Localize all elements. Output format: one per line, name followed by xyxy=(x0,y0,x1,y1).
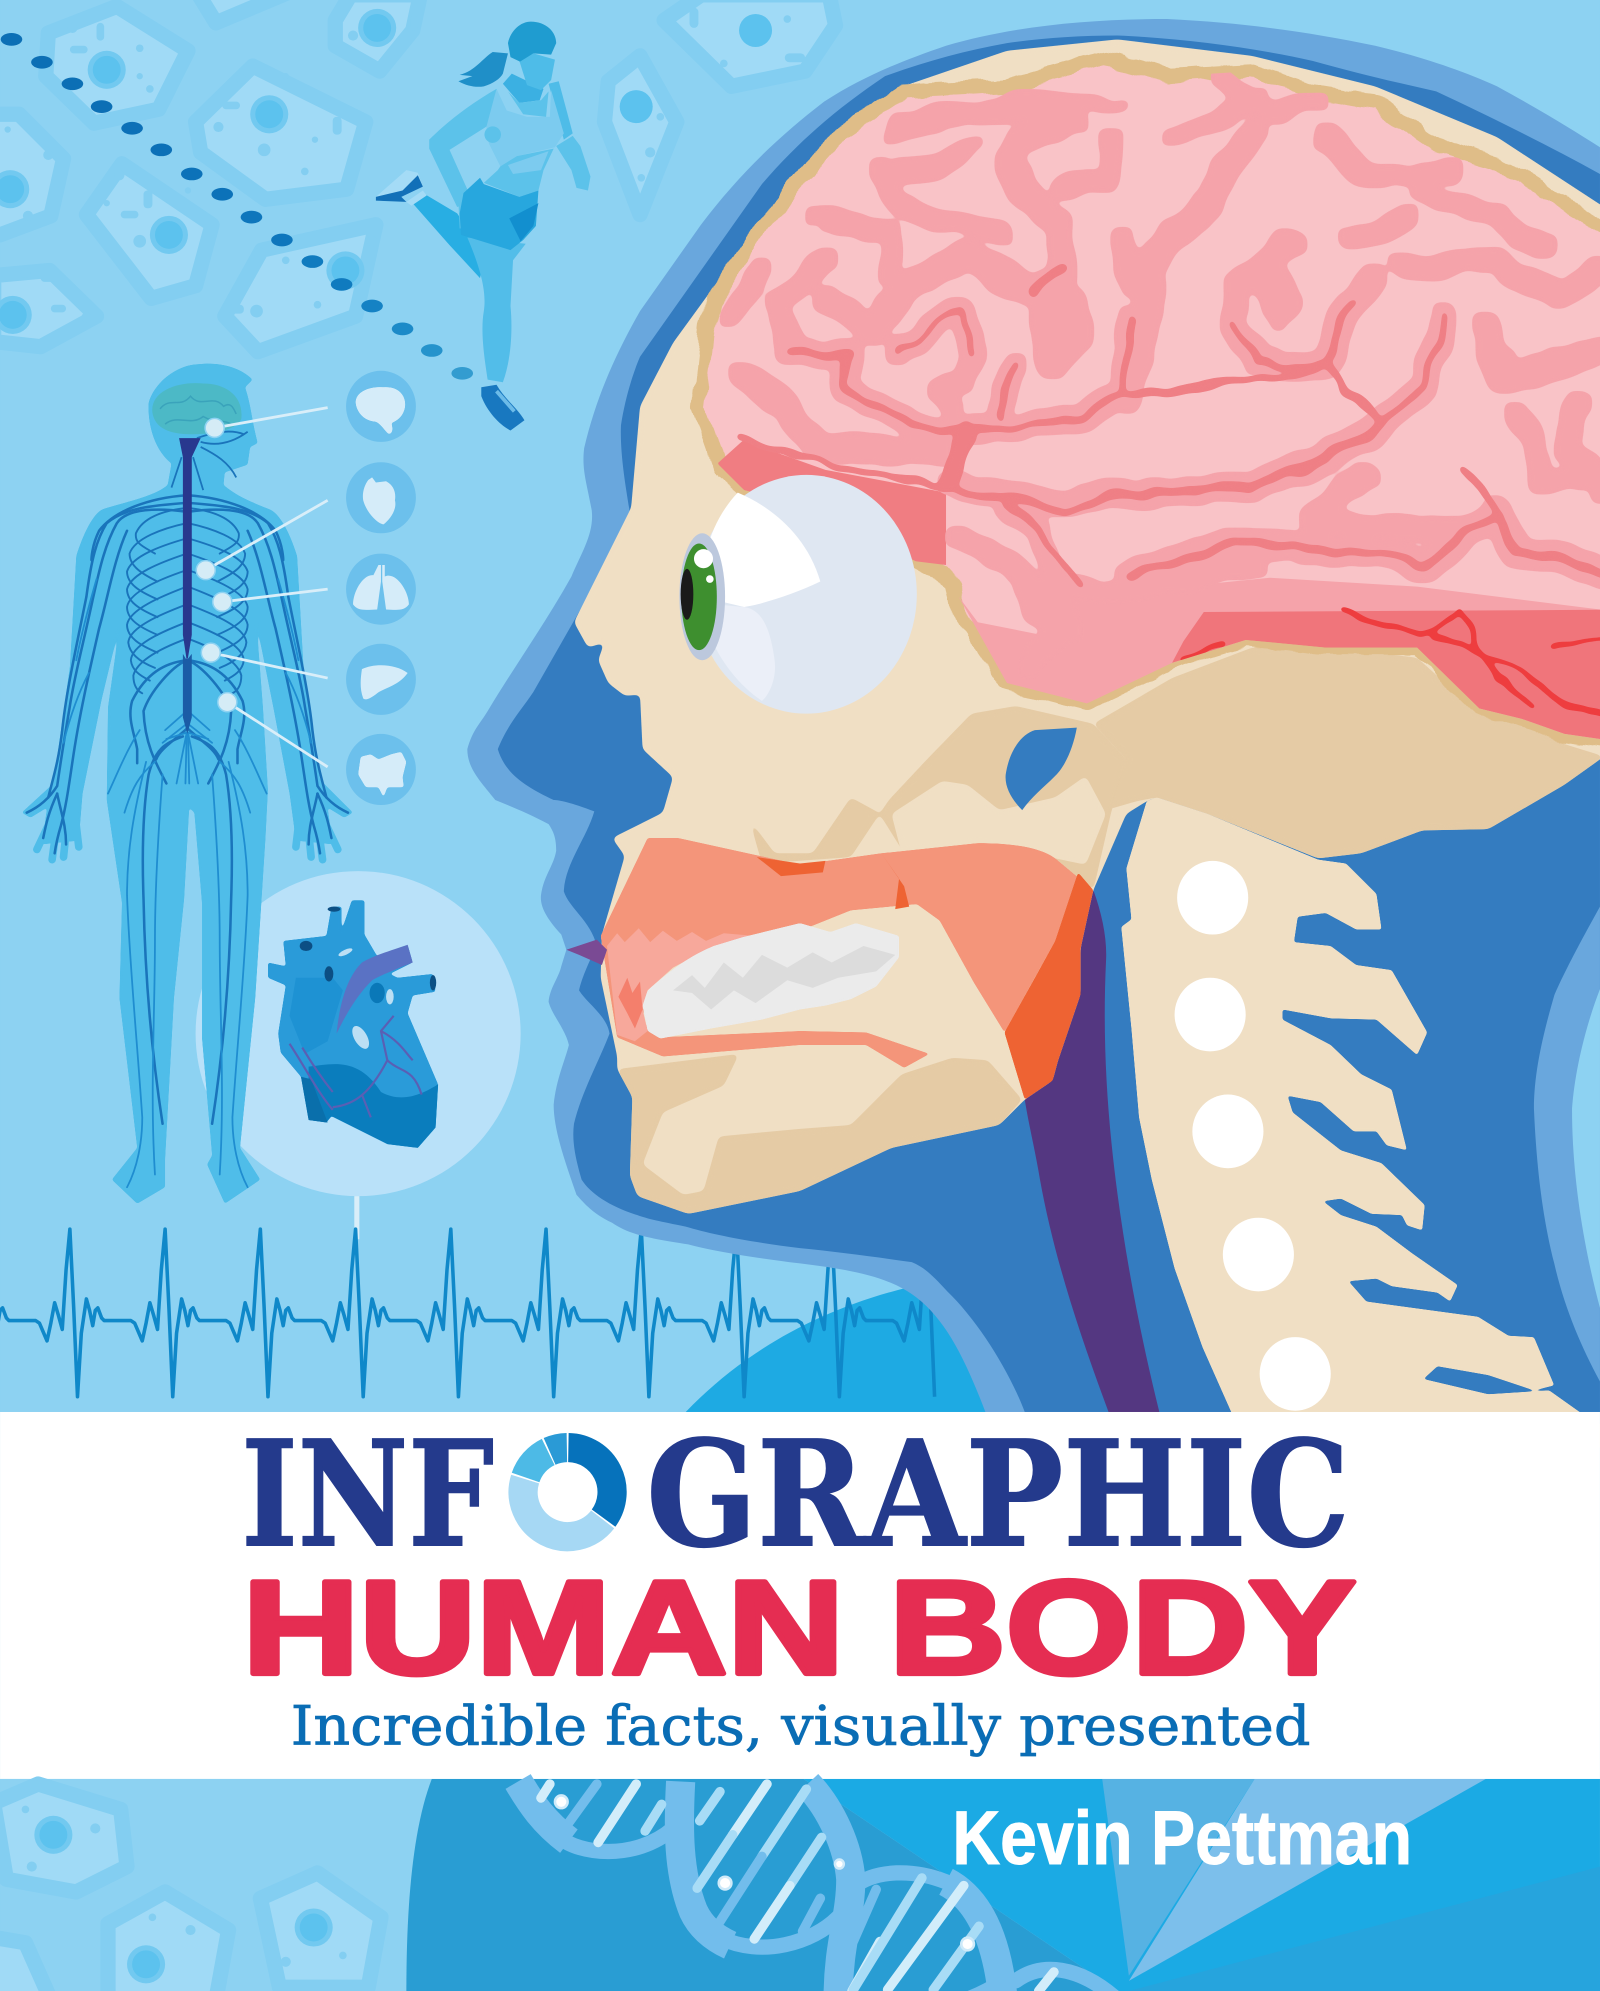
gum spikes xyxy=(618,978,643,1029)
temporal lobe shade xyxy=(959,578,1600,739)
title letters: GRAPHIC xyxy=(646,1409,1350,1580)
cell xyxy=(86,164,212,298)
midriff xyxy=(484,149,554,197)
callout lines xyxy=(206,408,328,767)
highlights xyxy=(694,549,713,568)
standing leg xyxy=(467,237,526,382)
mouth cavity xyxy=(601,838,1093,1068)
tank top xyxy=(486,89,564,166)
right nerves xyxy=(188,495,348,1187)
pupil xyxy=(681,569,693,620)
spinal cord xyxy=(179,438,201,660)
letter O: O xyxy=(533,1445,602,1535)
heart body xyxy=(268,900,438,1148)
bright panel xyxy=(804,1779,1600,1991)
medium folds xyxy=(730,76,1600,668)
cell xyxy=(196,66,366,199)
eye xyxy=(679,475,917,714)
back of neck sky area xyxy=(1572,989,1600,1308)
facet xyxy=(1129,1867,1600,1991)
heart highlights xyxy=(337,947,394,1052)
aorta xyxy=(337,945,413,1034)
brain of figure xyxy=(152,383,242,434)
title: INFOGRAPHIC xyxy=(241,1409,1350,1580)
callout dots xyxy=(196,418,237,712)
icon: liver xyxy=(346,644,416,715)
brain outline xyxy=(698,58,1600,762)
head nerves xyxy=(171,432,248,490)
neck xyxy=(503,74,544,103)
teeth xyxy=(643,923,899,1039)
callout lines and organ icons xyxy=(196,371,416,805)
teeth shadow xyxy=(673,946,895,1009)
heart connector line xyxy=(354,1196,359,1239)
icon: intestines xyxy=(346,734,416,805)
rear shoe xyxy=(376,175,423,202)
nervous system figure xyxy=(22,364,353,1204)
back hand xyxy=(458,201,485,229)
upper vessel shade xyxy=(290,978,343,1054)
ear canal xyxy=(1006,728,1077,810)
deep folds xyxy=(743,267,1600,587)
iris xyxy=(681,543,717,650)
iris ring xyxy=(679,533,725,660)
title: HUMAN BODY: HUMAN BODY xyxy=(243,1554,1356,1703)
cell xyxy=(0,114,64,235)
body silhouette xyxy=(22,364,353,1204)
shorts xyxy=(460,178,538,250)
cheekbone highlight xyxy=(891,776,1106,865)
skull xyxy=(574,39,1600,1214)
cell xyxy=(664,0,836,86)
cell xyxy=(335,0,420,71)
lips xyxy=(566,940,607,965)
lower eye shade xyxy=(701,603,775,701)
spine xyxy=(1121,797,1600,1448)
back of neck light band xyxy=(1534,907,1600,1382)
bottom cell xyxy=(0,1784,127,1892)
bottom cell xyxy=(108,1892,229,1991)
eyeball xyxy=(696,475,917,714)
heart illustration xyxy=(268,900,438,1148)
sock xyxy=(406,190,427,206)
cheekbone shade xyxy=(749,706,1126,890)
helix thick strands xyxy=(518,1781,1003,1991)
back arm xyxy=(429,89,505,207)
vessel openings xyxy=(300,907,436,1003)
trail of dots xyxy=(1,33,473,380)
back of skull shade xyxy=(1093,645,1600,858)
eye highlight xyxy=(701,493,820,607)
bottom cell xyxy=(0,1936,51,1991)
midriff highlight xyxy=(508,151,549,174)
donut chart O xyxy=(523,1448,612,1537)
shorts shade xyxy=(509,203,538,241)
right upper arm xyxy=(549,81,573,140)
shoe laces xyxy=(497,391,514,411)
nasal fold xyxy=(757,857,825,876)
band background xyxy=(0,1779,1600,1991)
head anatomy xyxy=(467,19,1600,1448)
right forearm xyxy=(556,136,590,190)
cell xyxy=(46,6,188,123)
lower ventricle xyxy=(309,1064,438,1148)
ponytail xyxy=(458,52,508,87)
rear shoe upper xyxy=(376,170,423,197)
heartbeat line xyxy=(0,1229,935,1397)
facet xyxy=(1102,1779,1255,1976)
author name: Kevin Pettman xyxy=(952,1796,1412,1881)
back vessel shade xyxy=(301,1077,328,1122)
cell pattern top xyxy=(0,0,836,352)
coronary veins xyxy=(290,1016,422,1117)
red vessels xyxy=(1178,612,1600,724)
chest xyxy=(508,91,549,117)
facet xyxy=(1129,1779,1486,1981)
head inner dark layer xyxy=(498,36,1600,1412)
cell xyxy=(0,268,97,347)
icon: heart xyxy=(346,462,416,533)
icon: lungs xyxy=(346,554,416,625)
brain folds xyxy=(717,76,1600,762)
helix rungs xyxy=(541,1784,1054,1991)
rear shin xyxy=(411,193,485,278)
front shoe xyxy=(481,385,524,430)
heart bubble xyxy=(196,871,521,1196)
DNA helix xyxy=(518,1781,1117,1991)
left nerves xyxy=(27,495,187,1187)
cell xyxy=(604,56,677,215)
cerebellum overlay xyxy=(1172,610,1600,739)
brain xyxy=(698,58,1600,762)
icon: brain xyxy=(346,371,416,442)
throat xyxy=(1025,890,1159,1412)
lower jaw shade xyxy=(617,1054,1022,1214)
bottom cell xyxy=(260,1873,381,1987)
bottom band xyxy=(0,1779,1600,1991)
deltoid xyxy=(484,126,501,143)
fingers xyxy=(37,825,338,860)
title band xyxy=(0,1412,1600,1779)
throat orange overlap xyxy=(1004,872,1093,1100)
gums xyxy=(607,928,754,1041)
helix beads xyxy=(555,1795,974,1950)
cell xyxy=(196,0,295,23)
brain folds of figure xyxy=(160,396,236,424)
face xyxy=(519,53,555,90)
helix thin arcs xyxy=(560,1828,1117,1991)
lower spinal cord xyxy=(183,654,192,734)
vertebra holes xyxy=(1175,861,1331,1411)
cell xyxy=(225,225,377,352)
hair xyxy=(508,22,556,62)
dark panel xyxy=(406,1779,1117,1991)
subtitle: Incredible facts, visually presented xyxy=(291,1694,1310,1758)
head outer contour xyxy=(467,19,1600,1412)
runner xyxy=(376,22,590,430)
shoulder xyxy=(686,1276,1016,1412)
title letters: INF xyxy=(241,1409,494,1580)
palate fold xyxy=(881,853,909,909)
lower front lobe deep shade xyxy=(717,441,946,565)
